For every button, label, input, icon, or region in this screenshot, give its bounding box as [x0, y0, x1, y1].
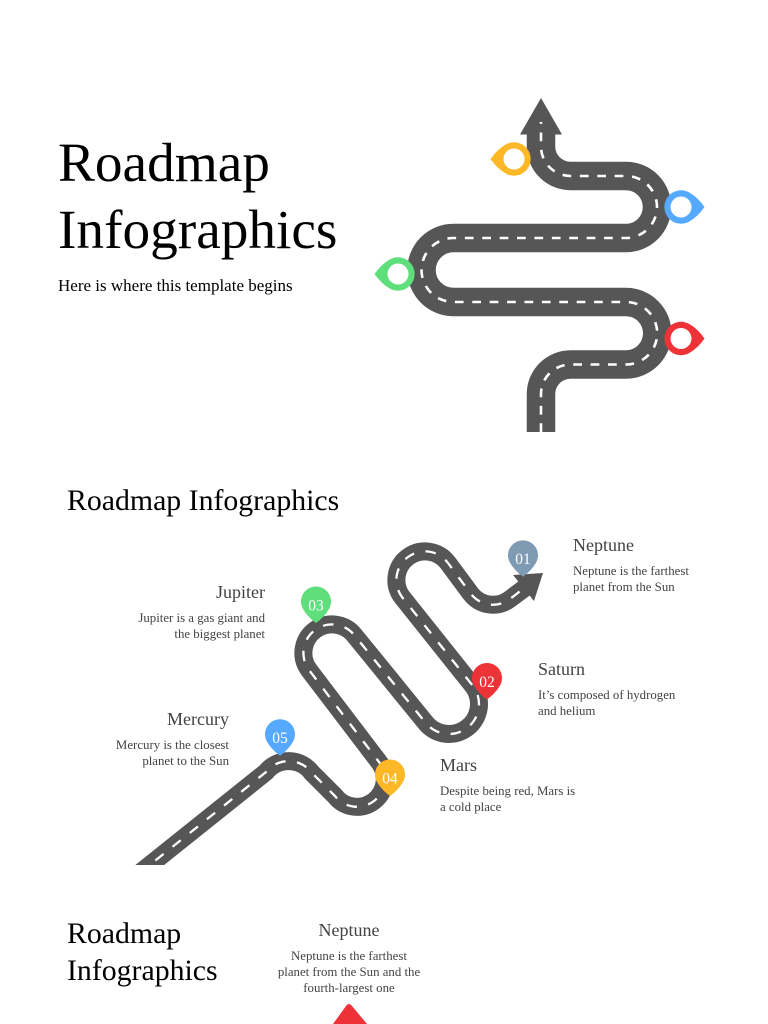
pin 01: [508, 540, 538, 577]
label: Jupiter: Jupiter is a gas giant and: [138, 611, 265, 625]
label: Neptune: [573, 535, 689, 594]
title: Infographics: [58, 199, 337, 260]
pin 05: 05: [272, 730, 288, 747]
pin 05: [265, 719, 295, 756]
section heading: vertical roadmap: [67, 917, 218, 987]
pin: red: [664, 322, 704, 355]
label: Neptune vertical roadmap: Neptune is the farthest: [291, 949, 407, 963]
arrowhead: diagonal road: [513, 573, 543, 601]
section heading: vertical roadmap: Roadmap: [67, 917, 181, 950]
section heading: vertical roadmap: Infographics: [67, 954, 218, 987]
pin: blue: [664, 190, 704, 224]
label: Mars: Despite being red, Mars is: [440, 784, 575, 798]
label: Jupiter: the biggest planet: [174, 627, 265, 641]
label: Neptune: Neptune is the farthest: [573, 564, 689, 578]
red triangle marker: [333, 1004, 367, 1024]
pin 03: [301, 587, 331, 623]
pin: yellow: [490, 142, 531, 176]
pin 01: 01: [515, 551, 531, 568]
pin 04: [375, 760, 405, 796]
label: Neptune: planet from the Sun: [573, 580, 675, 594]
pin 03: 03: [308, 598, 324, 614]
subtitle: Here is where this template begins: [58, 276, 293, 295]
title: Roadmap: [58, 132, 270, 193]
label: Mercury: [116, 709, 229, 768]
pin 02: [472, 663, 502, 700]
title: [58, 132, 337, 260]
label: Saturn: It’s composed of hydrogen: [538, 688, 675, 702]
label: Neptune vertical roadmap: fourth-largest one: [303, 981, 395, 995]
label: Mercury: Mercury is the closest: [116, 738, 229, 752]
pin: green: [374, 257, 415, 291]
label: Mercury: planet to the Sun: [142, 754, 229, 768]
label: Neptune: Neptune: [573, 535, 634, 555]
label: Saturn: and helium: [538, 704, 595, 718]
label: Mars: [440, 755, 575, 814]
road: top serpentine with arrow: [422, 98, 657, 432]
section heading: winding roadmap: Roadmap Infographics: [67, 484, 339, 517]
label: Mars: a cold place: [440, 800, 501, 814]
label: Saturn: [538, 659, 676, 718]
pin 04: 04: [382, 770, 398, 788]
pin 02: 02: [479, 674, 495, 691]
road: diagonal serpentine with arrow: [121, 551, 543, 888]
label: Neptune vertical roadmap: planet from the Sun and the: [278, 965, 420, 979]
label: Mars: Mars: [440, 755, 477, 775]
arrowhead: top road: [520, 98, 562, 134]
label: Jupiter: [138, 582, 265, 641]
label: Neptune vertical roadmap: [278, 920, 420, 995]
label: Saturn: Saturn: [538, 659, 585, 679]
label: Neptune vertical roadmap: Neptune: [318, 920, 379, 940]
label: Jupiter: Jupiter: [216, 582, 265, 602]
label: Mercury: Mercury: [167, 709, 229, 729]
